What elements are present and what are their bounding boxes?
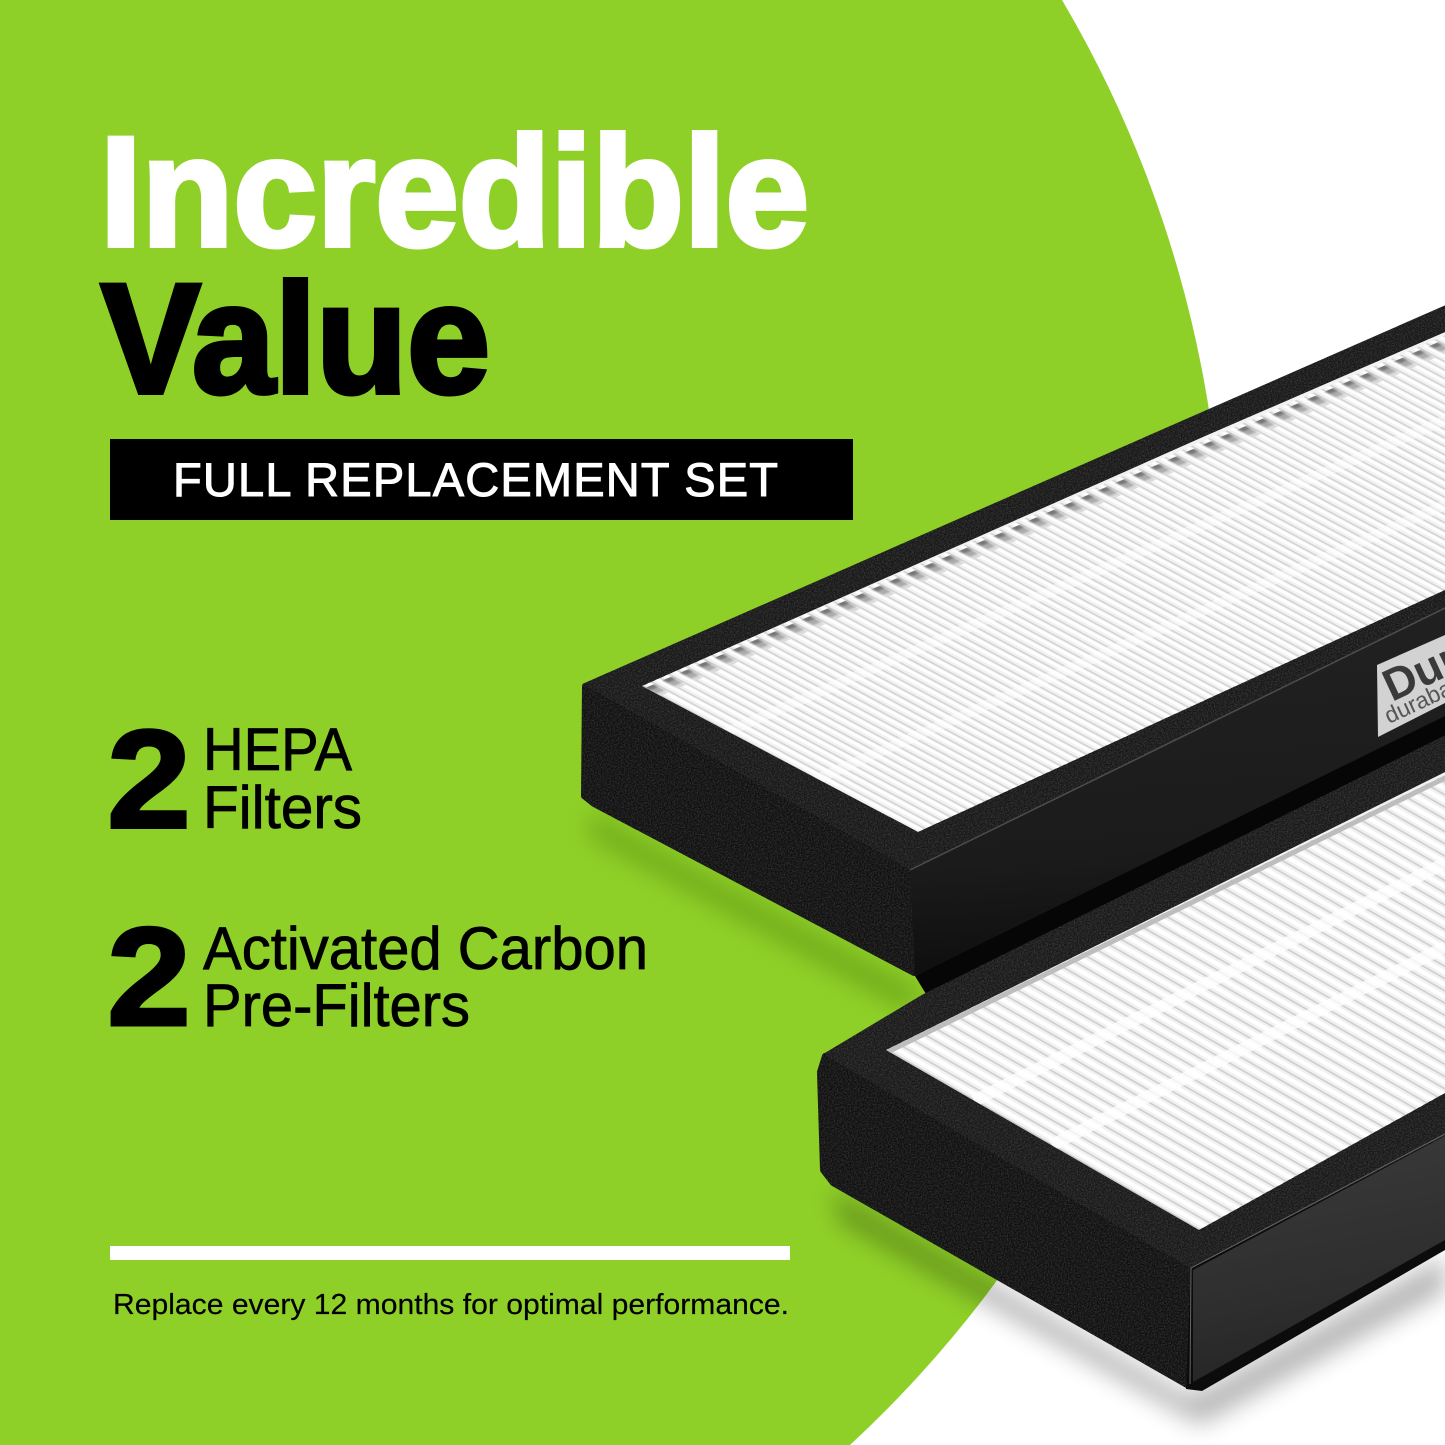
banner: full replacement set: FULL REPLACEMENT SET (173, 453, 778, 506)
banner: full replacement set (110, 439, 853, 520)
divider bar (110, 1246, 790, 1260)
item: 2 activated carbon pre-filters: Pre-Filters (203, 972, 470, 1039)
title: Value (101, 252, 490, 426)
filter 1 long front face (910, 608, 1445, 976)
filter 1 brand label (1377, 635, 1445, 737)
item: 2 HEPA filters (107, 700, 362, 858)
item: 2 HEPA filters: HEPA (203, 716, 352, 783)
item: 2 activated carbon pre-filters: Activated Carbon (203, 915, 648, 982)
item: 2 activated carbon pre-filters: 2 (107, 898, 191, 1055)
filter 2 side foam face (820, 1056, 1189, 1385)
filter 1 top frame (586, 307, 1445, 868)
filter 1 frame ridge (910, 608, 1445, 870)
title: Incredible (100, 106, 809, 280)
shadow under filters (590, 812, 1445, 1425)
filter 1 dark gap below front face (915, 700, 1445, 994)
filter 2 black bottom lip (1186, 1134, 1445, 1391)
filter 2 edge highlights (1190, 1134, 1445, 1384)
filter 1 pleated media (642, 332, 1445, 832)
item: 2 HEPA filters: 2 (107, 700, 191, 858)
filter 2 top frame (826, 737, 1445, 1267)
filter 1 side foam face (584, 686, 914, 973)
product: second filter (820, 737, 1445, 1391)
item: 2 HEPA filters: Filters (203, 774, 362, 841)
item: 2 activated carbon pre-filters (107, 898, 648, 1055)
product: first filter (584, 307, 1445, 994)
filter 2 pleated media (886, 769, 1445, 1230)
title (100, 106, 809, 426)
replacement note: Replace every 12 months for optimal performance. (113, 1289, 789, 1321)
filter 2 long front face (1193, 1136, 1445, 1382)
